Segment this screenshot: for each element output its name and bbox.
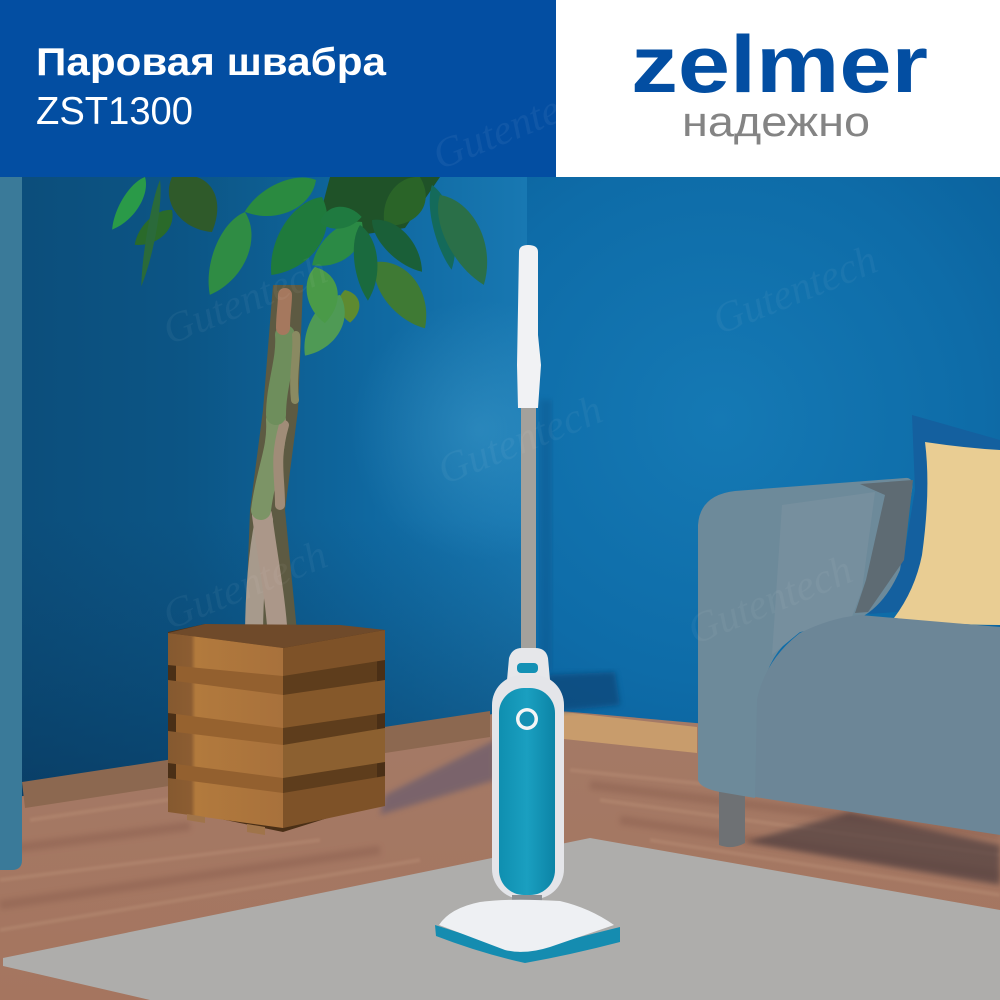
mop knob: [516, 708, 538, 730]
header: blue title panel: [0, 0, 604, 179]
sofa armrest: [698, 478, 912, 798]
title: Паровая швабра: [36, 41, 386, 84]
mop neck joint: [512, 895, 542, 905]
header watermark: Gutentech: [427, 72, 604, 179]
wooden planter: [168, 624, 385, 835]
mop body: [492, 675, 564, 899]
sofa: [698, 415, 1000, 847]
armrest inner panel: [772, 492, 875, 655]
sofa back shadow: [855, 480, 913, 613]
watermarks: [157, 237, 884, 654]
mop base rim: [435, 925, 620, 963]
tagline: надежно: [682, 98, 870, 145]
mop neck: [507, 648, 550, 680]
watermarks: Gutentech: [432, 387, 609, 494]
header: white logo panel: [556, 0, 1000, 177]
plant: [106, 162, 503, 642]
yellow pillow: [894, 442, 1000, 625]
mop handle: [517, 245, 541, 408]
plant trunk: [245, 285, 303, 642]
sofa leg: [719, 790, 745, 847]
mop pole: [521, 405, 536, 655]
rug: [3, 838, 1000, 1000]
mop base: [439, 900, 614, 952]
watermarks: Gutentech: [157, 532, 334, 639]
zelmer logo: zelmer: [631, 20, 928, 110]
curtain: [0, 177, 22, 870]
watermarks: Gutentech: [682, 547, 859, 654]
plant leaves: [106, 162, 503, 365]
teal panel: [499, 688, 555, 895]
watermarks: Gutentech: [707, 237, 884, 344]
blue pillow: [868, 415, 1000, 614]
neck button: [517, 663, 538, 673]
sofa seat: [755, 615, 1000, 835]
steam mop: [435, 245, 620, 963]
model name: ZST1300: [36, 90, 193, 133]
watermarks: Gutentech: [157, 247, 334, 354]
